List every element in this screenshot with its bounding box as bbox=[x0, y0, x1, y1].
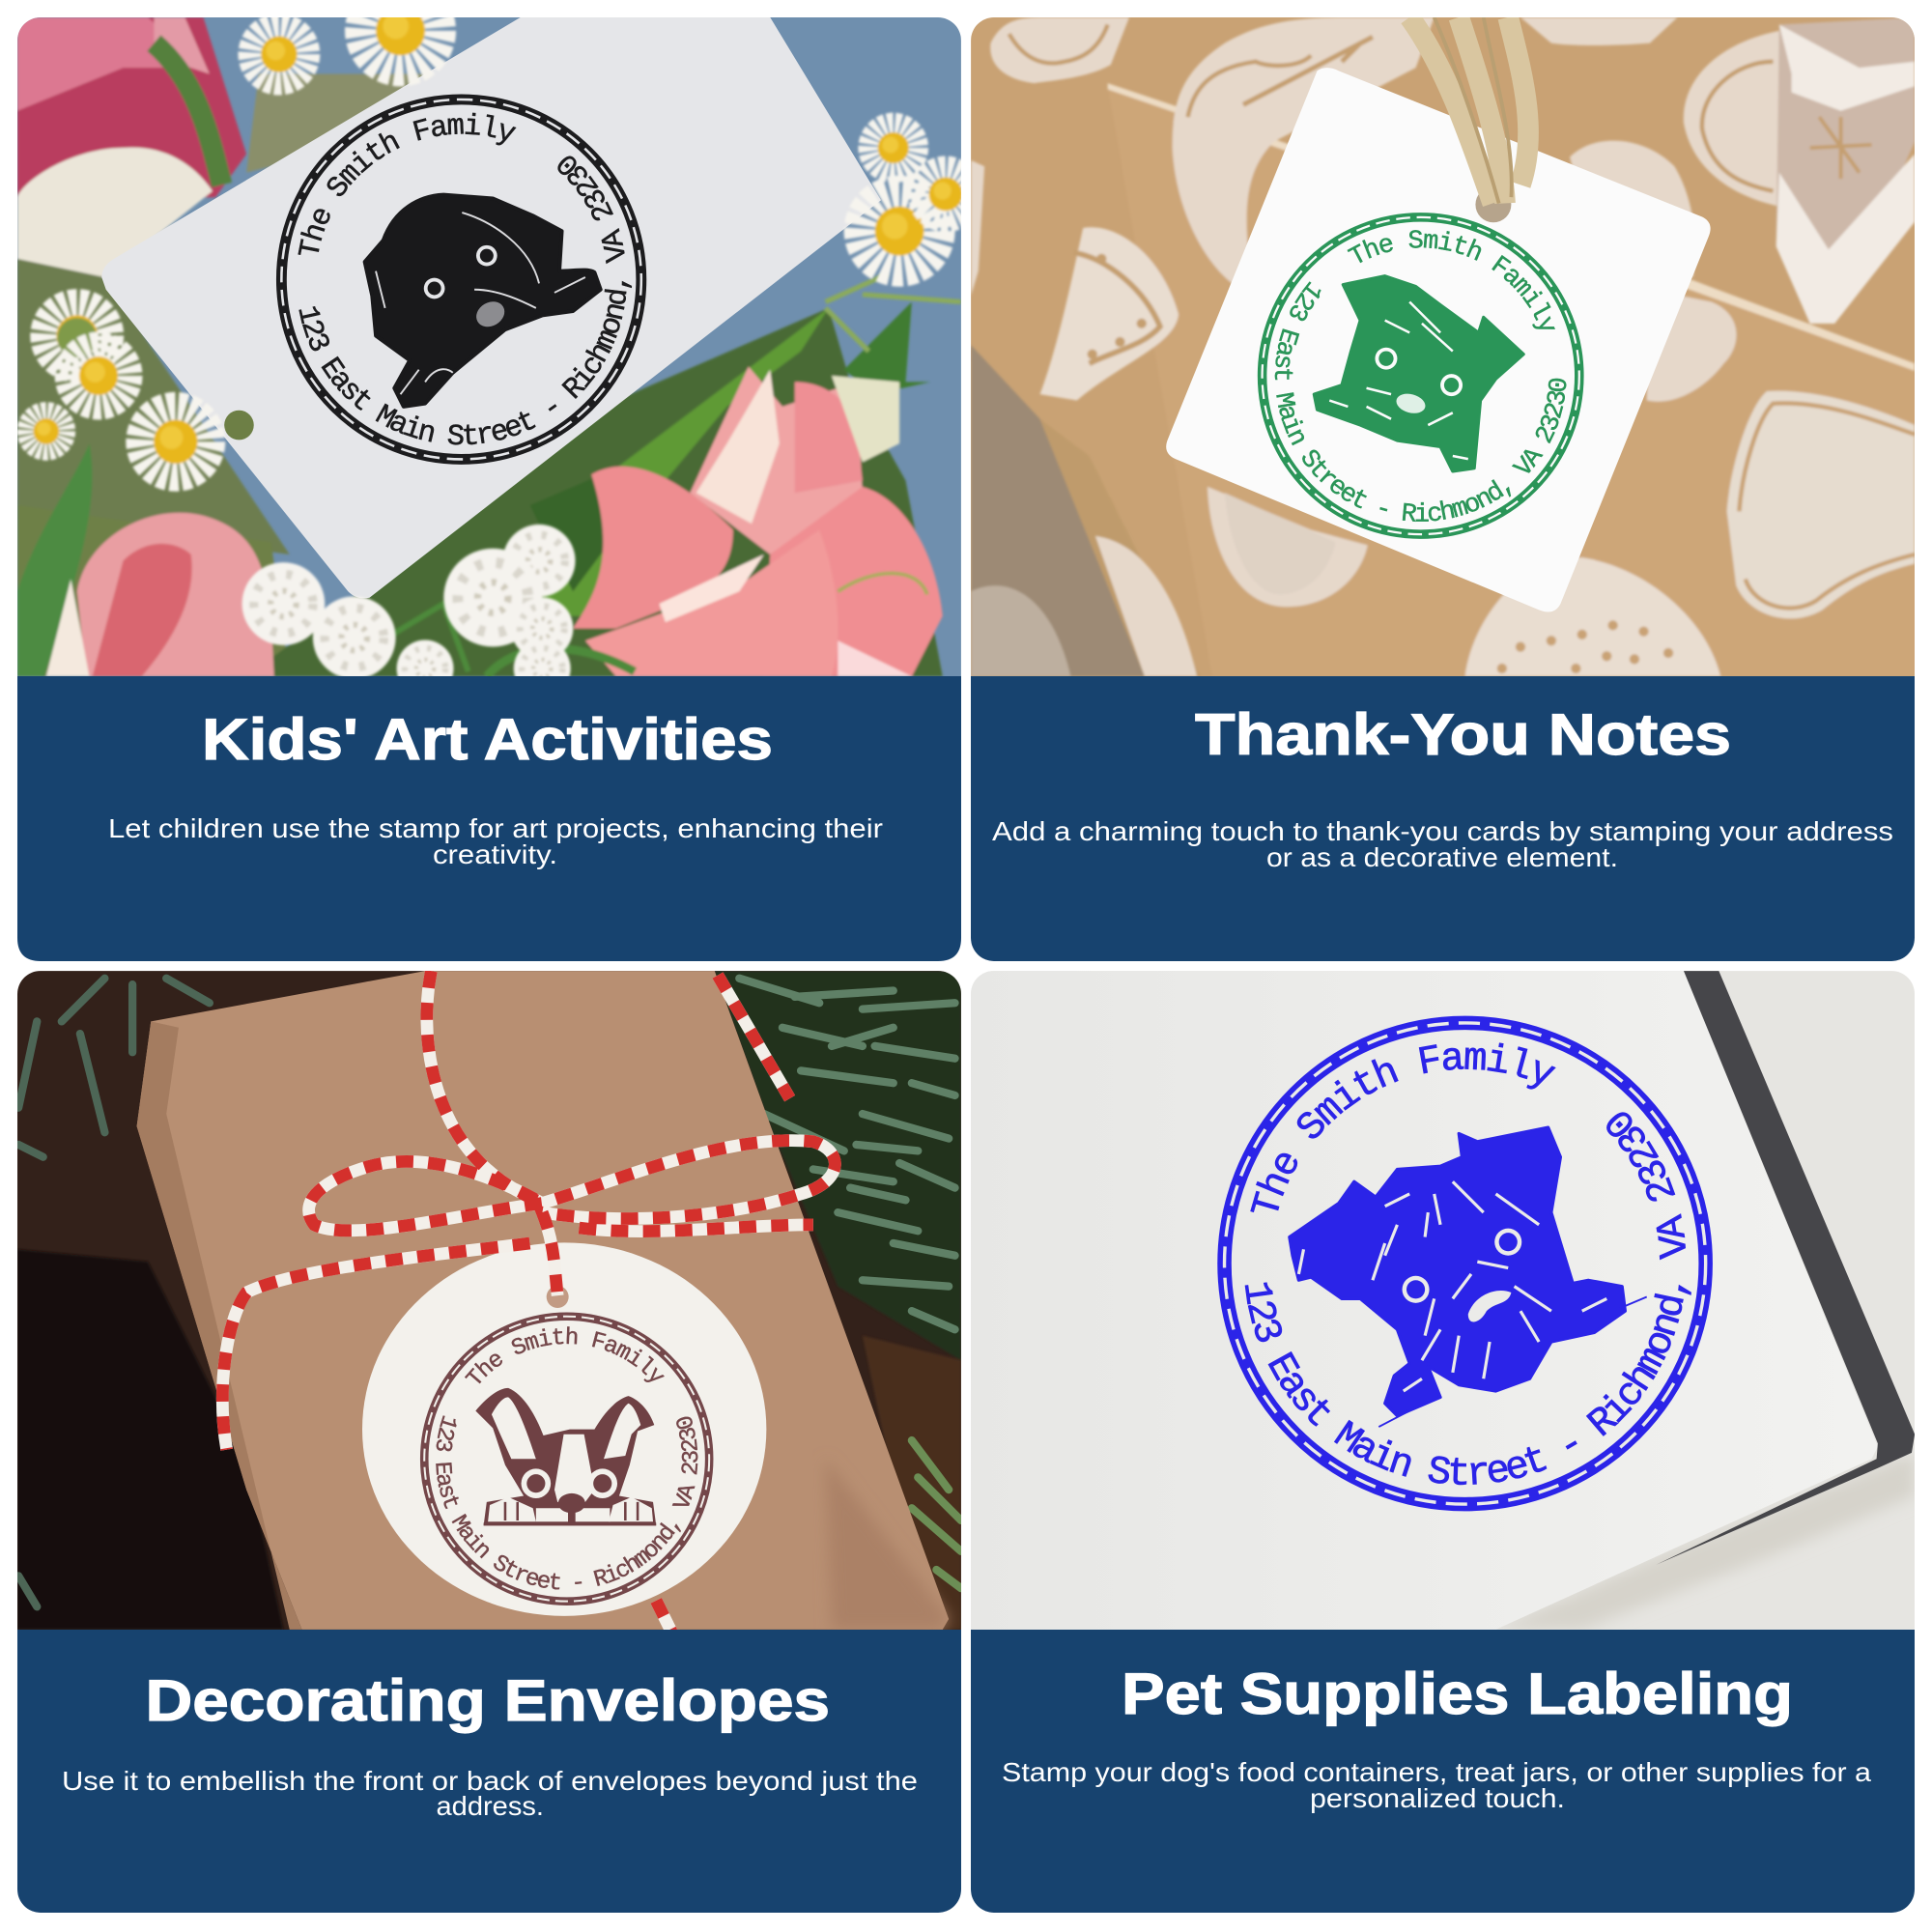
tag bbox=[1166, 68, 1711, 612]
dog: brown Boston terrier bbox=[475, 1388, 656, 1525]
heading: Pet Supplies Labeling bbox=[1122, 1662, 1793, 1726]
photo: open notebook page bbox=[971, 971, 1915, 1631]
panel: Decorating Envelopes bbox=[17, 971, 961, 1913]
caption band bbox=[971, 1630, 1915, 1913]
dog: black spaniel bbox=[365, 195, 601, 407]
stamp: black: The Smith Family bbox=[298, 112, 516, 255]
dog: green terrier bbox=[1314, 276, 1523, 471]
stamp: brown: The Smith Family bbox=[465, 1326, 665, 1383]
body text: or as a decorative element. bbox=[1266, 842, 1618, 872]
heading: Decorating Envelopes bbox=[145, 1668, 830, 1733]
body text bbox=[992, 821, 1892, 867]
body text: address. bbox=[437, 1791, 544, 1821]
photo: kraft parcel with twine and round tag bbox=[17, 971, 961, 1634]
body text: creativity. bbox=[433, 839, 557, 869]
caption band bbox=[17, 1630, 961, 1913]
stamp: green: The Smith Family bbox=[1347, 230, 1555, 329]
stamp: brown bbox=[419, 1312, 713, 1605]
body text: Let children use the stamp for art projects, enhancing their bbox=[108, 813, 883, 843]
stamp: brown: 123 East Main Street - Richmond, VA 23230 bbox=[436, 1415, 697, 1590]
heading: Kids' Art Activities bbox=[202, 707, 773, 772]
body text: Use it to embellish the front or back of envelopes beyond just the bbox=[62, 1766, 918, 1796]
red and white twine bbox=[222, 971, 835, 1634]
body text: personalized touch. bbox=[1310, 1783, 1565, 1813]
body text: Stamp your dog's food containers, treat jars, or other supplies for a bbox=[1002, 1757, 1871, 1787]
parcel bbox=[137, 971, 949, 1630]
photo: kraft gift box with tag bbox=[971, 17, 1915, 676]
round tag bbox=[362, 1242, 766, 1616]
caption band bbox=[971, 676, 1915, 961]
body text bbox=[64, 1771, 917, 1816]
heading: Thank-You Notes bbox=[1195, 702, 1731, 767]
dog: blue terrier bbox=[1290, 1127, 1647, 1427]
panel: Pet Supplies Labeling bbox=[971, 971, 1915, 1913]
stamp: green: 123 East Main Street - Richmond, VA 23230 bbox=[1275, 281, 1567, 522]
body text bbox=[108, 813, 883, 869]
panel: Kids' Art Activities bbox=[17, 17, 961, 676]
photo: stamped card among flowers bbox=[17, 0, 973, 696]
body text bbox=[1002, 1757, 1871, 1813]
body text: Add a charming touch to thank-you cards by stamping your address bbox=[992, 816, 1893, 846]
caption band bbox=[17, 676, 961, 961]
twine bbox=[1409, 17, 1528, 203]
stamp: blue: 123 East Main Street - Richmond, VA 23230 bbox=[1244, 1112, 1691, 1486]
card bbox=[101, 17, 881, 598]
panel: Thank-You Notes bbox=[954, 17, 1915, 984]
stamp: black: 123 East Main Street - Richmond, VA 23230 bbox=[298, 156, 632, 445]
stamp: blue: The Smith Family bbox=[1250, 1042, 1556, 1213]
